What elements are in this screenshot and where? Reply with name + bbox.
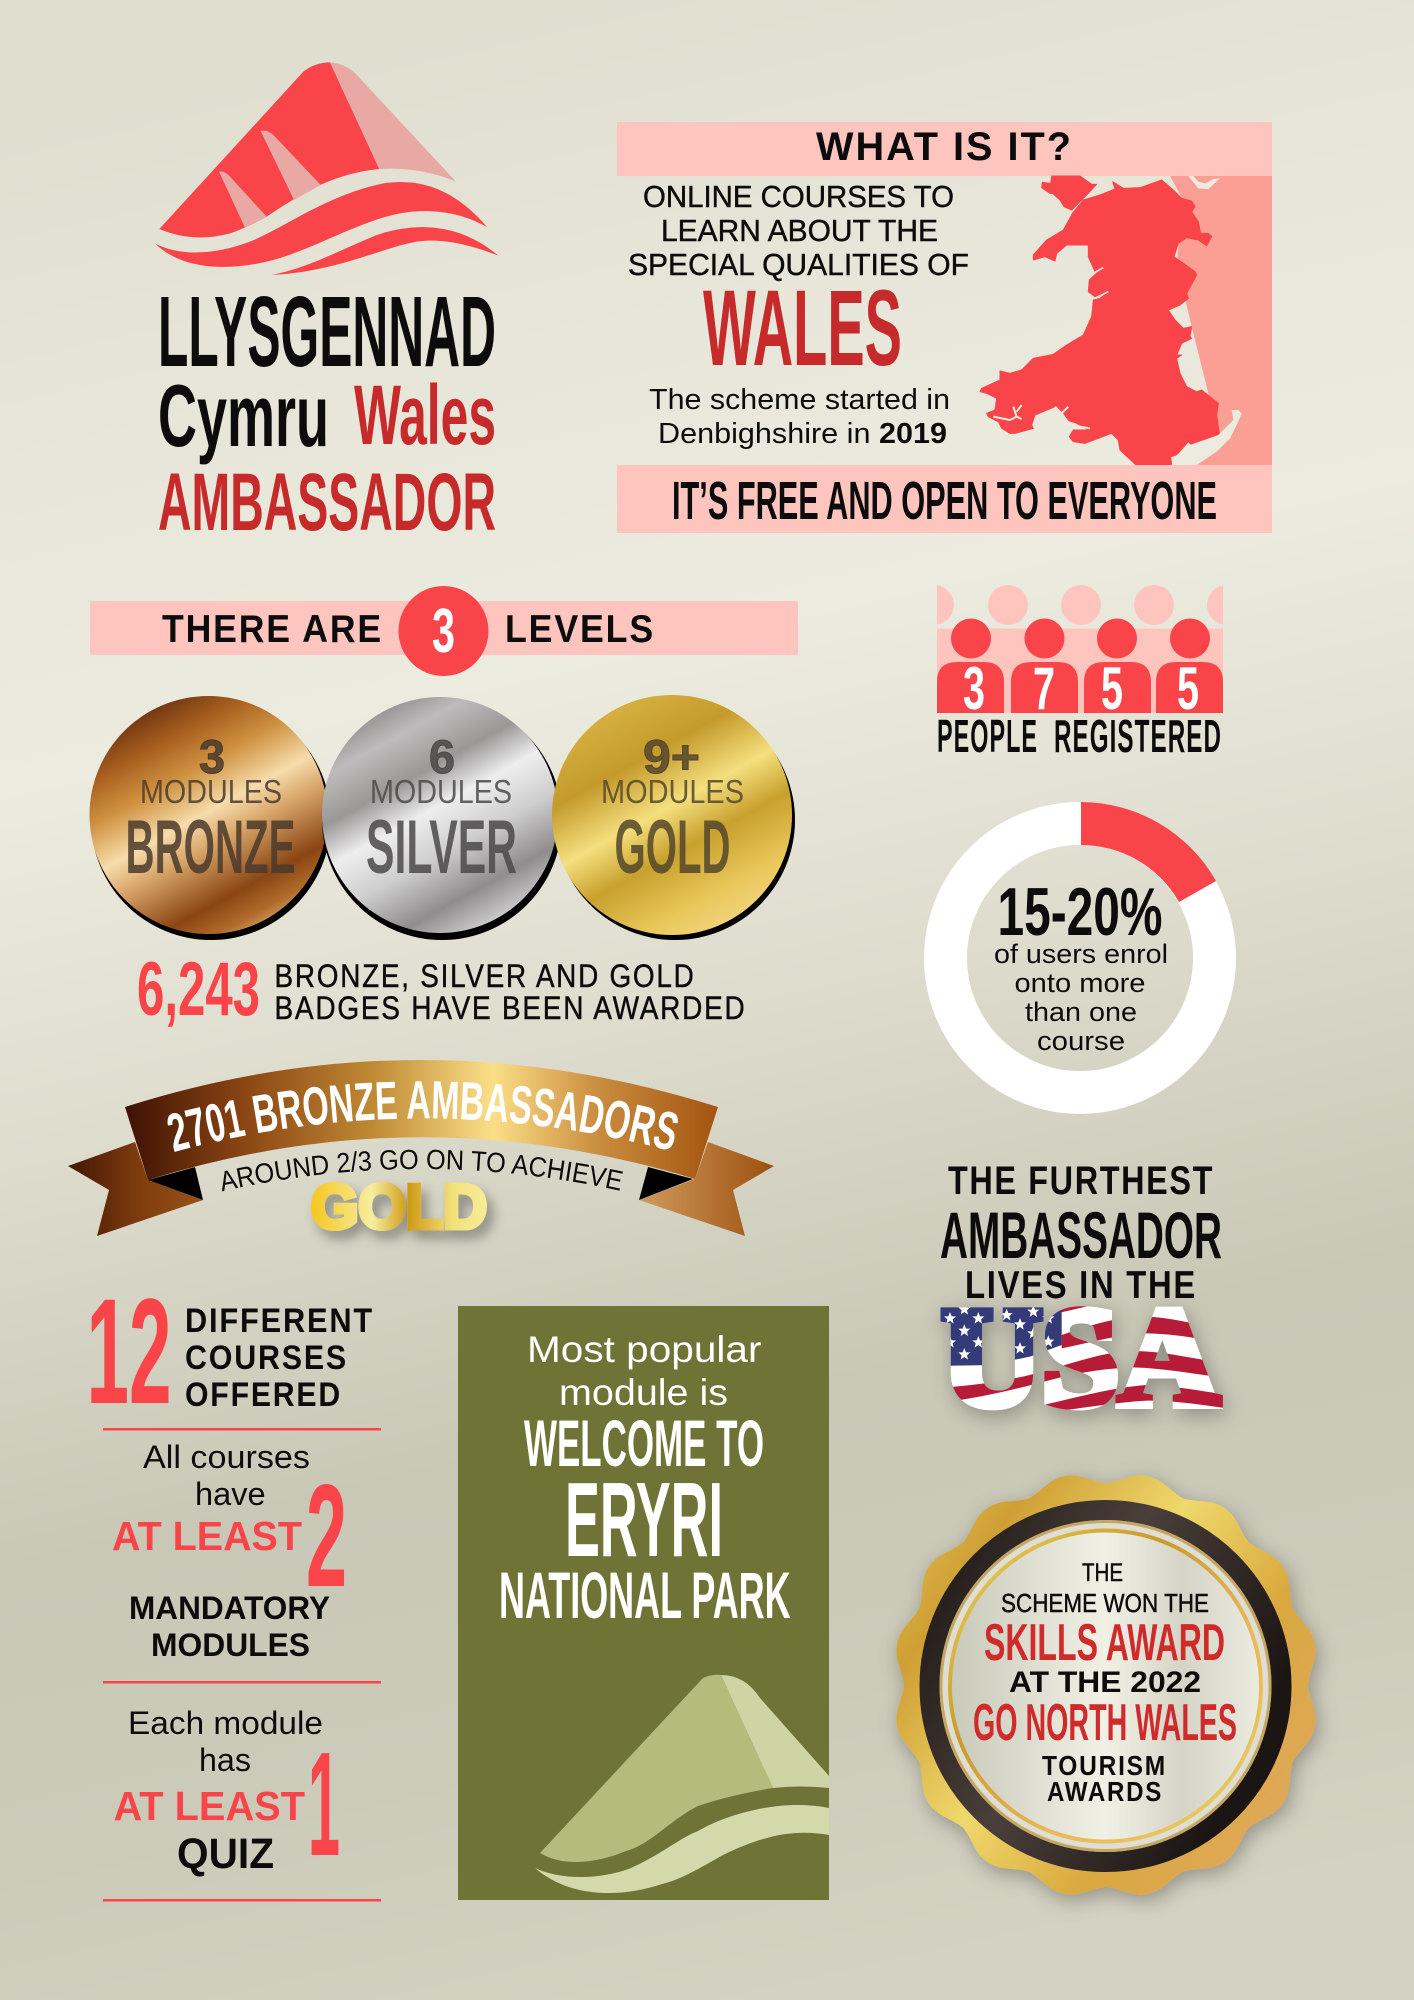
scheme start text: The scheme started in	[649, 384, 950, 416]
medal: bronze	[90, 696, 331, 940]
stat: at least 1 quiz: AT LEAST	[114, 1783, 305, 1829]
stat: at least 2 mandatory modules: MODULES	[151, 1627, 310, 1663]
count 3755	[963, 655, 1199, 722]
medal: silver: SILVER	[366, 805, 517, 890]
panel: most popular module	[458, 1306, 829, 1900]
count 3755: 5	[1177, 655, 1199, 722]
badge text	[973, 1559, 1237, 1807]
caption: people registered: PEOPLE	[937, 710, 1038, 762]
text: furthest ambassador: AMBASSADOR	[940, 1198, 1222, 1272]
badge black ring	[930, 1510, 1282, 1862]
heading: what is it: WHAT IS IT?	[816, 125, 1073, 169]
stat: 6,243 badges: BRONZE, SILVER AND GOLD	[274, 958, 696, 994]
stat: at least 1 quiz: QUIZ	[177, 1830, 274, 1878]
stat: 12 courses: COURSES	[185, 1339, 348, 1377]
stat: at least 2 mandatory modules: MANDATORY	[129, 1590, 330, 1626]
map of Wales	[980, 176, 1242, 465]
logo lower wave	[272, 227, 498, 275]
footer bar	[617, 465, 1272, 533]
scheme start text: Denbighshire in 2019	[658, 418, 947, 450]
badge text: TOURISM	[1042, 1750, 1167, 1781]
ribbon folds	[148, 1167, 693, 1200]
intro text: LEARN ABOUT THE	[661, 213, 938, 248]
stat: at least 1 quiz: Each module	[128, 1705, 323, 1741]
logo mountain red face	[159, 62, 379, 237]
medal: silver: 6	[429, 730, 455, 783]
stat: 6,243 badges	[137, 947, 746, 1032]
logo: mountain and waves	[155, 62, 498, 275]
stat: at least 1 quiz	[114, 1705, 340, 1887]
panel: what is it	[617, 122, 1272, 533]
banner: there are 3 levels	[90, 586, 798, 676]
popular module text: ERYRI	[565, 1461, 723, 1579]
badge text: SKILLS AWARD	[984, 1614, 1225, 1672]
medal: bronze: BRONZE	[126, 805, 296, 890]
stat: 6,243 badges: 6,243	[137, 947, 260, 1032]
banner: there are 3 levels: THERE ARE	[162, 608, 383, 651]
text: furthest ambassador	[940, 1159, 1222, 1307]
popular module text	[499, 1329, 791, 1632]
donut caption: course	[1037, 1026, 1125, 1056]
logo upper wave	[155, 182, 487, 267]
word: USA flag lettering: USA	[942, 1280, 1219, 1435]
word: Ambassador: AMBASSADOR	[158, 457, 496, 548]
intro text: SPECIAL QUALITIES OF	[628, 247, 969, 282]
donut caption	[994, 939, 1168, 1056]
ribbon right tail	[639, 1142, 774, 1236]
ribbon band	[125, 1060, 718, 1180]
donut caption: than one	[1025, 997, 1137, 1027]
count 3755: 3	[963, 655, 985, 722]
number circle	[398, 586, 488, 676]
text: LLYSGENNAD	[158, 276, 496, 388]
medal: silver	[322, 697, 562, 940]
badge: skills award	[880, 1460, 1330, 1910]
popular module text: WELCOME TO	[524, 1406, 764, 1480]
intro text: ONLINE COURSES TO	[643, 179, 954, 214]
icon: green mountain	[535, 1675, 829, 1893]
pale red block behind map	[1170, 176, 1272, 465]
caption: people registered	[937, 710, 1222, 762]
logo mountain shaded right face	[330, 62, 456, 182]
icon: people registered	[937, 585, 1223, 752]
ribbon subtitle: AROUND 2/3 GO ON TO ACHIEVE	[222, 1150, 623, 1192]
medal: gold: MODULES	[601, 773, 744, 810]
stat: at least 2 mandatory modules: have	[195, 1476, 266, 1512]
stat: 12 courses: 12	[86, 1267, 172, 1435]
logo mountain highlights	[219, 131, 321, 228]
badge text: THE	[1082, 1559, 1123, 1587]
chart: donut 15-20%	[946, 802, 1216, 1092]
stat: at least 2 mandatory modules: AT LEAST	[112, 1513, 302, 1559]
stat: 6,243 badges: BADGES HAVE BEEN AWARDED	[274, 990, 746, 1026]
stat: at least 2 mandatory modules: 2	[306, 1454, 347, 1617]
banner: there are 3 levels: LEVELS	[505, 608, 655, 651]
caption: people registered: REGISTERED	[1054, 710, 1222, 762]
medal: gold	[552, 695, 795, 940]
word: gold metallic: GOLD	[311, 1173, 487, 1242]
header bar	[617, 122, 1272, 176]
stat: at least 2 mandatory modules	[112, 1439, 347, 1663]
word: Cymru: Cymru	[158, 366, 329, 465]
donut caption: onto more	[1014, 968, 1146, 998]
count 3755: 7	[1033, 655, 1055, 722]
popular module text: NATIONAL PARK	[499, 1558, 791, 1632]
scheme start text	[649, 384, 950, 450]
stat: at least 1 quiz: has	[199, 1742, 251, 1778]
popular module text: module is	[559, 1372, 728, 1413]
ribbon title: 2701 BRONZE AMBASSADORS	[168, 1081, 678, 1152]
badge text: AWARDS	[1047, 1776, 1163, 1807]
stat: 12 courses	[86, 1267, 374, 1435]
text: furthest ambassador: LIVES IN THE	[965, 1264, 1197, 1307]
badge inner disc	[940, 1520, 1272, 1852]
popular module text: Most popular	[527, 1329, 762, 1370]
medal: bronze: MODULES	[140, 773, 282, 810]
medal: gold: 9+	[643, 730, 700, 783]
ribbon left tail	[68, 1142, 203, 1236]
intro text	[628, 179, 969, 282]
word: Wales large: WALES	[703, 267, 902, 388]
ribbon: bronze ambassadors	[68, 1060, 774, 1246]
medal: gold: GOLD	[614, 805, 730, 890]
donut value: 15-20%	[998, 874, 1162, 950]
text: furthest ambassador: THE FURTHEST	[948, 1159, 1214, 1203]
donut caption: of users enrol	[994, 939, 1168, 969]
word: Wales: Wales	[354, 368, 496, 462]
text: 1	[308, 1722, 340, 1887]
count 3755: 5	[1101, 655, 1123, 722]
stat: 12 courses: OFFERED	[185, 1376, 342, 1414]
logo wordmark	[158, 276, 496, 548]
badge text: SCHEME WON THE	[1001, 1588, 1209, 1618]
medal: silver: MODULES	[370, 773, 512, 810]
stat: at least 2 mandatory modules: All courses	[143, 1439, 310, 1475]
medal: bronze: 3	[199, 730, 225, 783]
stat: 12 courses: DIFFERENT	[185, 1302, 374, 1340]
number circle: 3	[432, 597, 455, 666]
badge text: AT THE 2022	[1009, 1666, 1201, 1699]
